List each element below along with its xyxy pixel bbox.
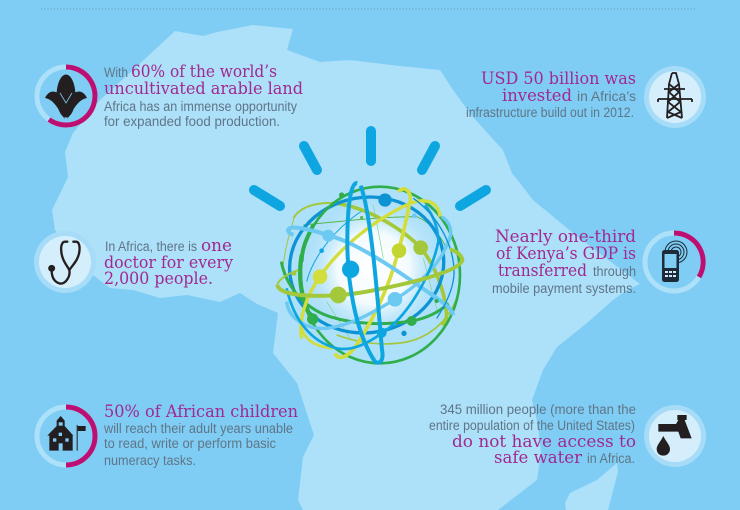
- text: arable land: With: [104, 65, 128, 80]
- text: mobile payments: of Kenya’s GDP is: [496, 244, 636, 264]
- text: infrastructure: [466, 69, 636, 120]
- panel: mobile payments: [492, 227, 703, 296]
- text: safe water: in Africa.: [587, 451, 635, 466]
- text: arable land: for expanded food production.: [104, 114, 280, 129]
- logo: Watson globe with rays: [254, 131, 486, 363]
- text: infrastructure: USD 50 billion was: [481, 69, 636, 89]
- text: safe water: [429, 402, 636, 468]
- icon: school house with 50% ring: [37, 407, 95, 465]
- panel: education: [37, 402, 298, 468]
- icon: tap with water drop: [644, 405, 706, 467]
- panel: infrastructure: [466, 66, 706, 128]
- text: education: numeracy tasks.: [104, 453, 196, 468]
- panel: arable land: [37, 62, 303, 129]
- text: mobile payments: [492, 227, 636, 296]
- text: safe water: 345 million people (more than the: [440, 402, 636, 417]
- text: education: to read, write or perform basic: [104, 436, 276, 451]
- text: safe water: entire population of the United States): [429, 418, 635, 433]
- text: education: will reach their adult years unable: [103, 421, 293, 436]
- text: doctors: [104, 236, 233, 289]
- text: doctors: one: [201, 236, 232, 256]
- text: infrastructure: invested: [502, 86, 572, 106]
- text: arable land: [104, 62, 303, 129]
- text: arable land: 60% of the world’s: [131, 62, 277, 82]
- panel: doctors: [34, 231, 233, 293]
- icon: power pylon: [644, 66, 706, 128]
- icon: corn with 60% ring: [37, 67, 95, 125]
- text: doctors: In Africa, there is: [105, 239, 197, 254]
- text: safe water: safe water: [494, 448, 583, 468]
- text: education: [103, 402, 298, 468]
- rays: [254, 131, 486, 206]
- panel: safe water: [429, 402, 706, 468]
- text: mobile payments: Nearly one-third: [495, 227, 636, 247]
- map: Africa silhouette: [52, 25, 640, 510]
- icon: mobile phone with one-third ring: [645, 233, 703, 291]
- globe: [277, 183, 462, 363]
- text: infrastructure: in Africa’s: [577, 89, 636, 104]
- text: mobile payments: mobile payment systems.: [492, 281, 636, 296]
- icon: stethoscope: [34, 231, 96, 293]
- text: doctors: doctor for every: [104, 253, 233, 273]
- text: infrastructure: infrastructure build out in 2012.: [466, 105, 634, 120]
- text: mobile payments: transferred: [498, 261, 587, 281]
- text: doctors: 2,000 people.: [104, 269, 213, 289]
- text: arable land: uncultivated arable land: [104, 79, 303, 99]
- text: mobile payments: through: [593, 264, 636, 279]
- text: education: 50% of African children: [104, 402, 298, 422]
- text: safe water: do not have access to: [452, 432, 636, 452]
- map: Madagascar: [565, 463, 618, 510]
- text: arable land: Africa has an immense opportunity: [104, 99, 297, 114]
